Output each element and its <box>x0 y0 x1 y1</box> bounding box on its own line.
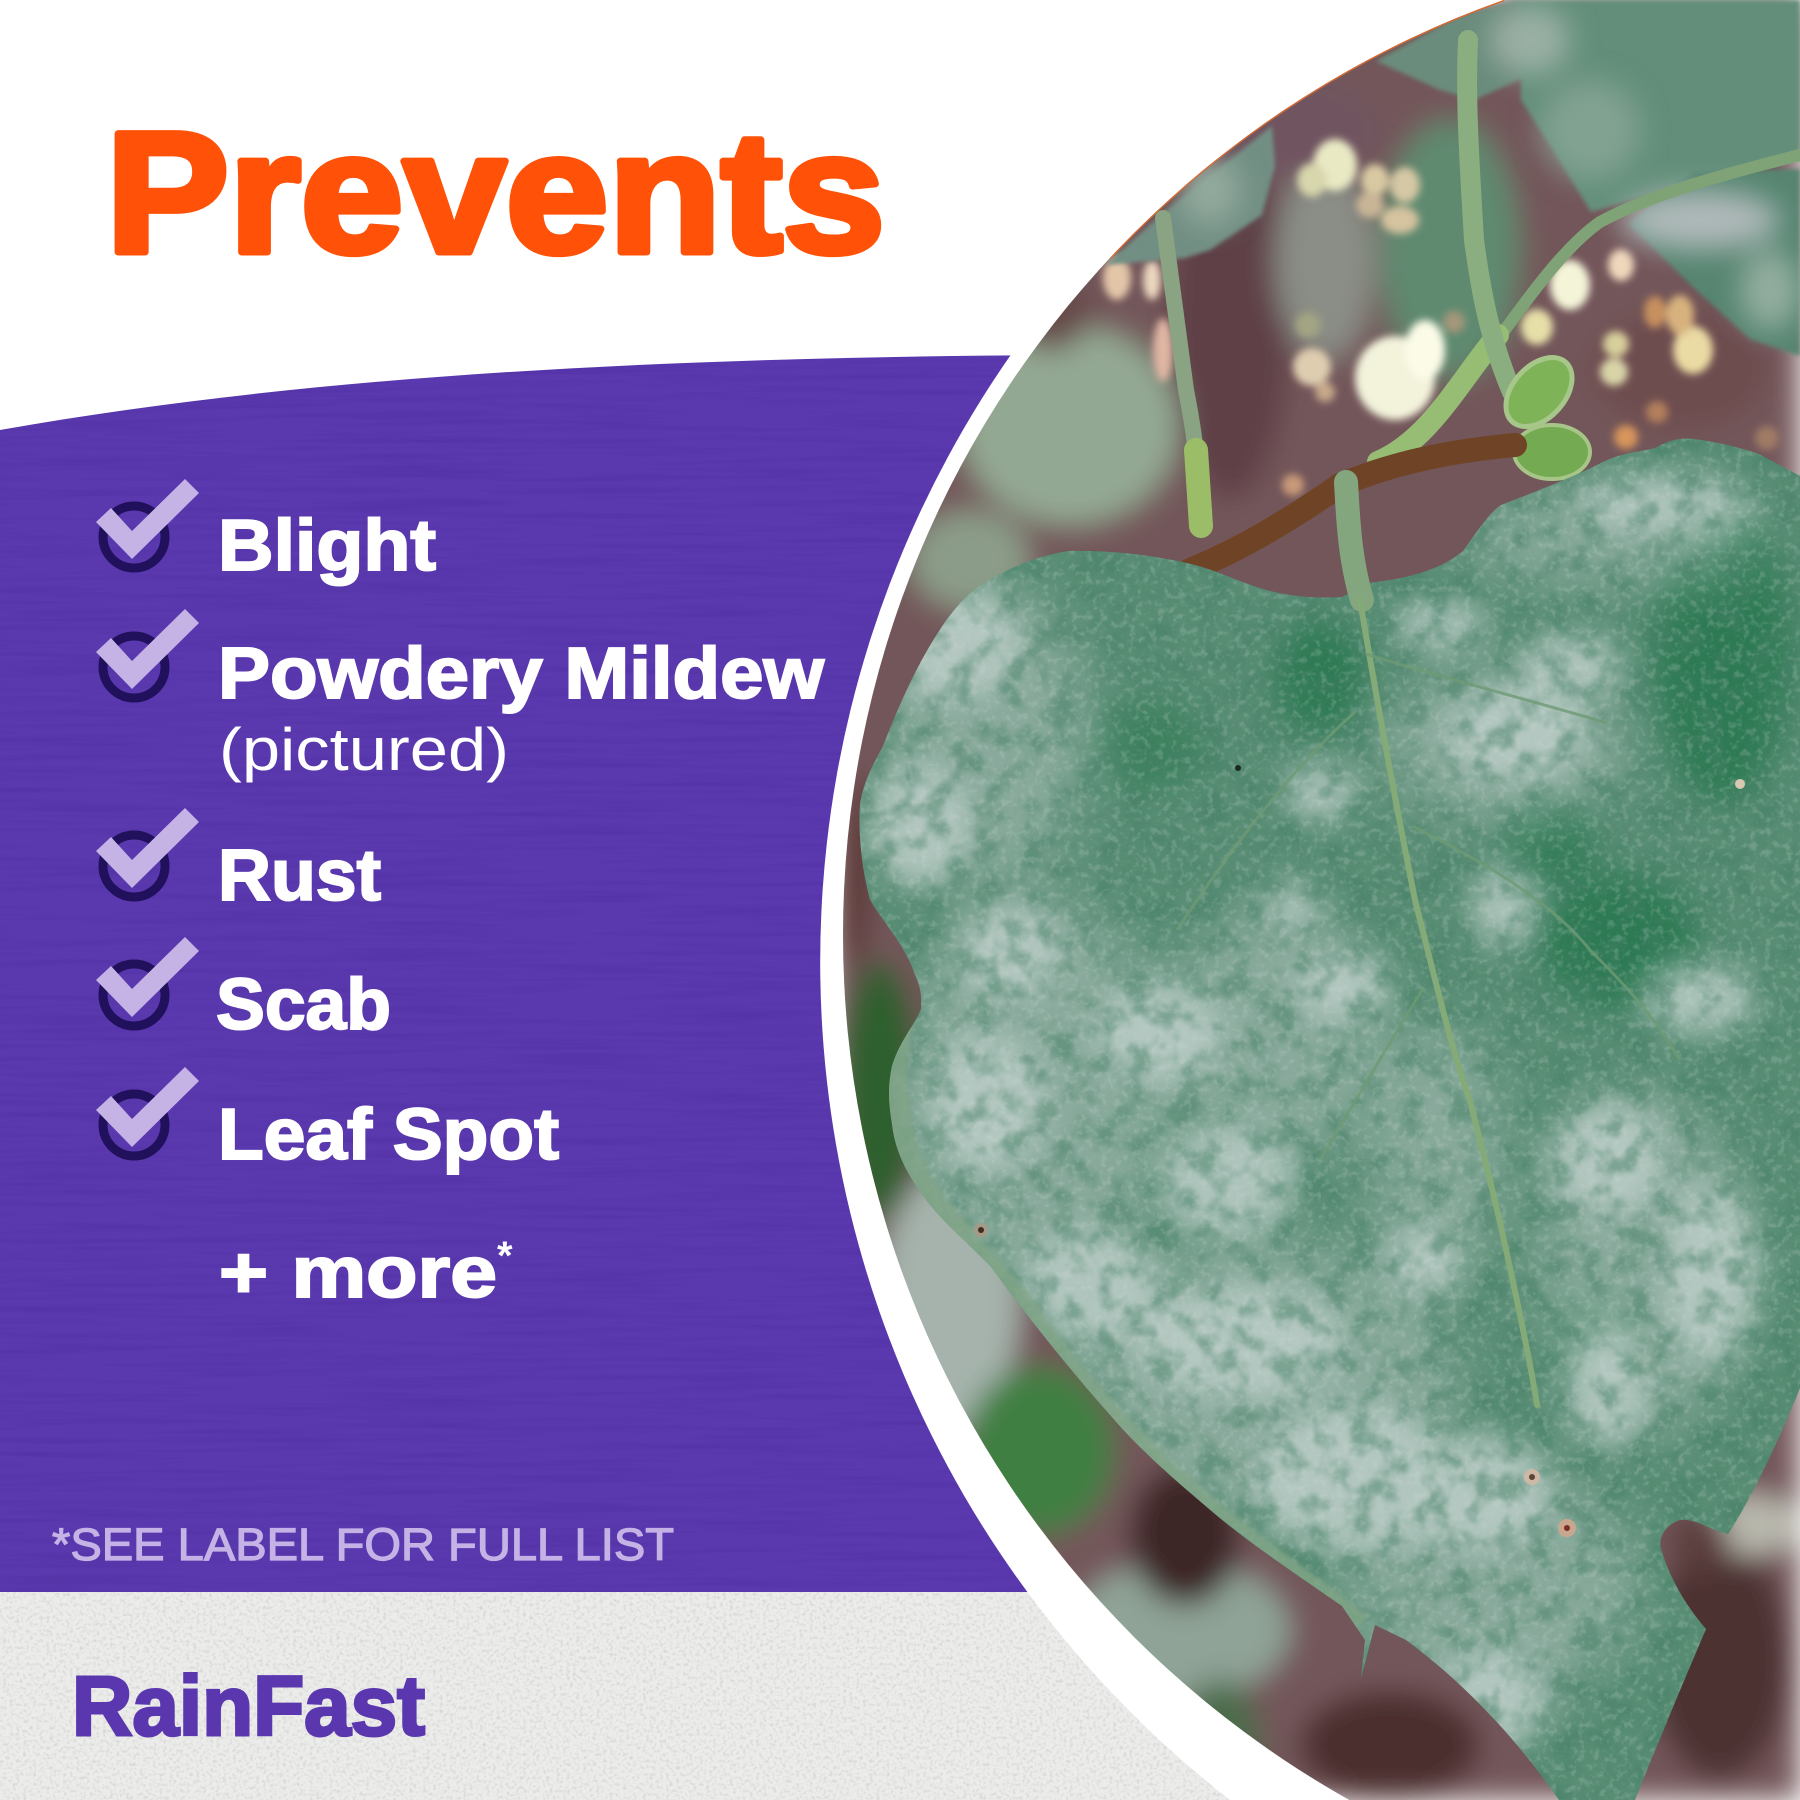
leaf main vein <box>1360 600 1537 1405</box>
panel: purple disease list background <box>0 355 1100 1592</box>
footnote: *SEE LABEL FOR FULL LIST <box>52 1519 674 1570</box>
item: Scab <box>96 937 391 1045</box>
check icon <box>96 1067 199 1156</box>
broad pale wash <box>884 494 1756 1699</box>
label: Scab <box>216 965 391 1045</box>
orange edge line <box>1110 0 1504 258</box>
item: Powdery Mildew <box>96 609 825 783</box>
bokeh highlights <box>1103 139 1779 496</box>
check icon <box>96 937 199 1026</box>
sublabel: (pictured) <box>219 716 509 783</box>
label: Blight <box>218 506 436 586</box>
dark green patches <box>1091 505 1791 1401</box>
powder patches on foliage <box>1180 5 1800 330</box>
label: Powdery Mildew <box>218 634 825 714</box>
photo background foliage <box>830 0 1800 1800</box>
leaf side veins <box>1177 654 1680 1160</box>
brand logo: RainFast: RainFast <box>72 1659 425 1753</box>
title: Prevents <box>106 97 885 289</box>
top foliage leaves <box>1105 0 1800 356</box>
bright powder blotches <box>867 478 1756 1751</box>
leaf spots <box>974 765 1745 1537</box>
item: Rust <box>96 808 381 916</box>
powder coverage on leaf <box>840 430 1800 1800</box>
check icon <box>96 609 199 698</box>
label: Rust <box>218 836 381 916</box>
checklist <box>96 479 825 1313</box>
item: Leaf Spot <box>96 1067 559 1175</box>
item: more: + more <box>219 1233 497 1313</box>
leaf petiole <box>1346 482 1362 600</box>
brown branch <box>1190 445 1515 570</box>
item: Blight <box>96 479 436 586</box>
photo: powdery mildew on leaf <box>830 0 1800 1800</box>
check icon <box>96 808 199 897</box>
leaf fold margin <box>895 1000 1360 1625</box>
label: Leaf Spot <box>218 1095 559 1175</box>
green stems <box>1163 40 1800 526</box>
flower buds <box>1504 355 1592 481</box>
item: more: * <box>497 1234 513 1278</box>
leaf body <box>859 439 1800 1800</box>
main leaf <box>840 430 1800 1800</box>
white ring around photo <box>820 0 1800 1800</box>
panel: textured grey footer <box>0 1592 1300 1800</box>
check icon <box>96 479 199 568</box>
